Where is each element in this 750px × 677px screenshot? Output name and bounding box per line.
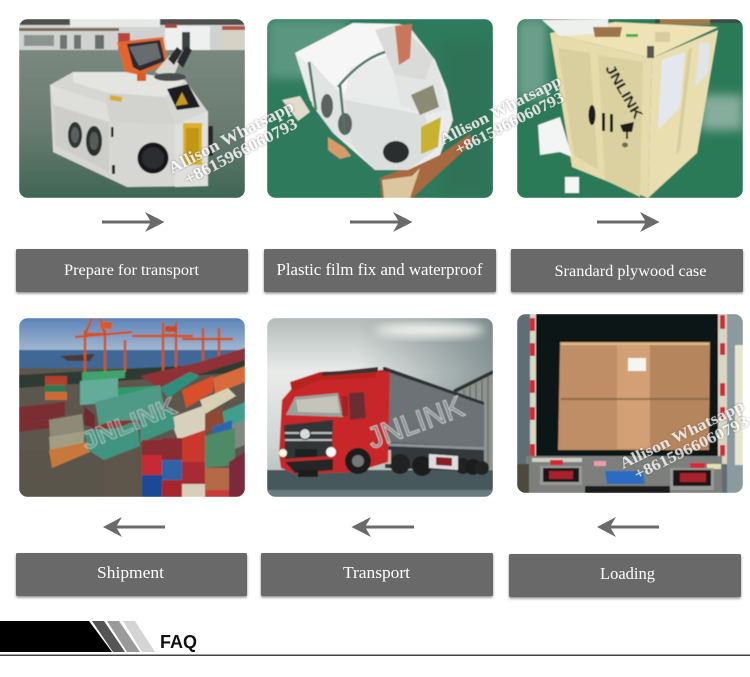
wheels <box>390 454 410 474</box>
label: transport: Transport <box>343 563 410 582</box>
label: loading <box>509 554 741 597</box>
label: prepare for transport: Prepare for transport <box>64 262 200 279</box>
label: transport <box>261 553 493 596</box>
label: standard plywood case: Srandard plywood case <box>554 263 706 280</box>
right stacks <box>140 348 245 388</box>
photo: machine wrapped in plastic film on pallet <box>267 19 493 198</box>
watermark: left whatsapp contact: Allison Whatsapp <box>165 97 297 178</box>
label: shipment <box>16 553 247 596</box>
label: plastic film fix and waterproof <box>264 249 496 292</box>
bumper and lights <box>526 456 722 493</box>
photo: red truck <box>267 318 493 497</box>
pallet <box>282 96 310 121</box>
machine body <box>50 72 208 187</box>
watermark: middle whatsapp contact: +8615966060793 <box>452 89 567 159</box>
arrow: step 2 to 3 <box>350 212 412 232</box>
warehouse <box>455 370 493 470</box>
left stacks <box>19 402 65 425</box>
crate <box>558 342 710 450</box>
trailer <box>385 367 484 447</box>
watermark: JNLINK <box>78 392 181 456</box>
teal stacks <box>95 384 165 426</box>
arrow: step 4 to 5 (loading to transport) <box>597 517 659 537</box>
cranes <box>75 318 233 372</box>
arrow: step 5 to 6 (transport to shipment) <box>352 517 414 537</box>
label: prepare for transport <box>16 249 248 292</box>
section header: FAQ banner: FAQ <box>160 632 197 652</box>
label: plastic film fix and waterproof: Plastic film fix and waterproof <box>276 260 483 279</box>
door frame stripes <box>530 314 536 464</box>
label: loading: Loading <box>600 564 655 583</box>
watermark: right whatsapp contact: +8615966060793 <box>632 413 750 483</box>
photo: crate loaded on truck <box>517 314 743 493</box>
microscope <box>154 54 180 75</box>
arrow: final step to shipment <box>103 517 165 537</box>
back stacks <box>45 376 67 385</box>
arrow: step 1 to 2 <box>102 212 164 232</box>
photo: laser welding machine ready for transport <box>19 19 245 198</box>
crate faces <box>550 22 718 58</box>
watermark: middle whatsapp contact <box>437 73 572 163</box>
watermark: right whatsapp contact <box>617 398 750 487</box>
arrow: step 3 to 4 <box>597 212 660 232</box>
photo: standard plywood case <box>517 19 743 198</box>
watermark: middle whatsapp contact: Allison Whatsapp <box>437 73 564 149</box>
cab <box>279 370 390 474</box>
label: standard plywood case <box>511 249 743 292</box>
crate marking: JNLINK <box>602 62 646 121</box>
watermark: left whatsapp contact: +8615966060793 <box>181 114 301 188</box>
photo: container port shipment <box>19 318 245 497</box>
section header: FAQ banner <box>0 621 750 656</box>
touch screen <box>117 37 168 75</box>
wrapped body <box>295 23 453 170</box>
label: shipment: Shipment <box>97 563 164 582</box>
watermark: right whatsapp contact: Allison Whatsapp <box>617 398 747 473</box>
watermark: JNLINK <box>363 390 468 456</box>
foreground <box>130 420 141 444</box>
